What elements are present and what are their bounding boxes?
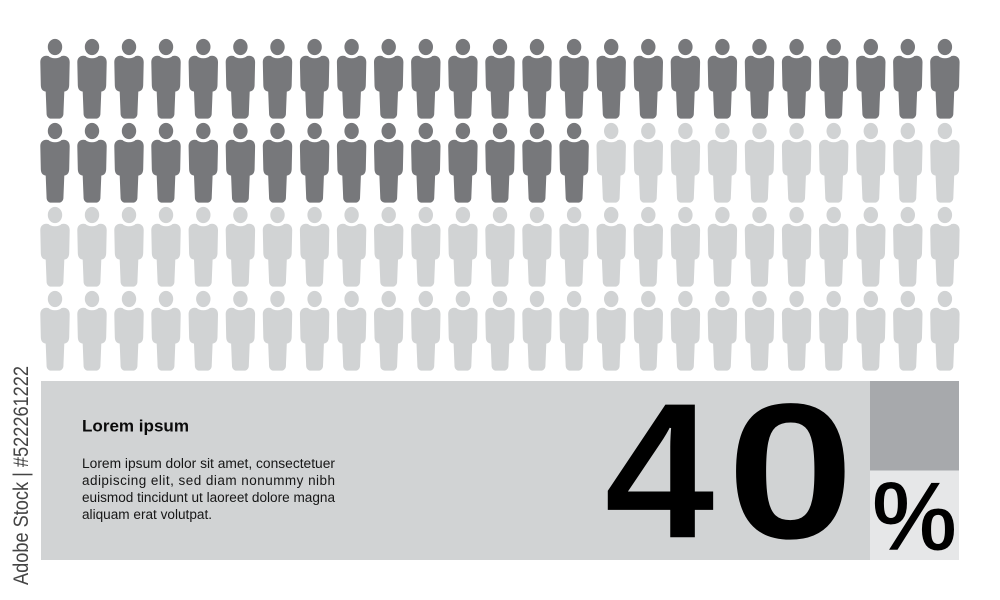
- pictogram row 4: 25 light people: [40, 291, 960, 371]
- pictogram row 3: 25 light people: [40, 207, 960, 287]
- big number: 40: [604, 362, 855, 580]
- body text: Lorem ipsum dolor sit amet, consectetuer: [82, 456, 336, 471]
- accent square: light grey: [870, 470, 959, 560]
- stock credit: Adobe Stock | #522261222: [10, 366, 33, 585]
- big number: 40: 4: [604, 362, 715, 580]
- heading: Lorem ipsum: [82, 418, 189, 436]
- pictogram row 1: 25 dark people: [40, 39, 960, 119]
- percent sign: %: [872, 461, 957, 571]
- body text: euismod tincidunt ut laoreet dolore magna: [82, 490, 335, 505]
- body text: adipiscing elit, sed diam nonummy nibh: [82, 473, 335, 488]
- body text: [82, 456, 336, 522]
- accent square: dark grey: [870, 381, 959, 470]
- big number: 40: 0: [726, 362, 855, 580]
- panel: summary band: [41, 381, 959, 560]
- body text: aliquam erat volutpat.: [82, 507, 212, 522]
- pictogram row 2: 15 dark people: [40, 123, 589, 203]
- pictogram row 2: 10 light people: [596, 123, 960, 203]
